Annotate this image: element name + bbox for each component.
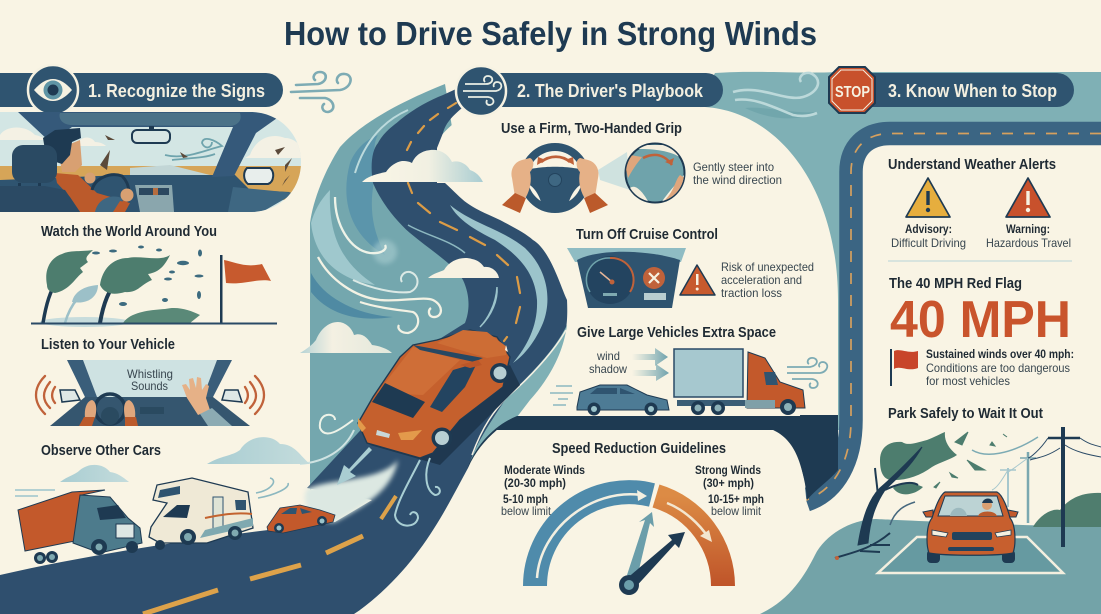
icon: stop sign: STOP [835, 84, 870, 101]
text: moderate winds: (20-30 mph) [504, 476, 566, 490]
text: moderate winds [501, 463, 585, 518]
gauge: speed reduction [535, 490, 723, 595]
title: How to Drive Safely in Strong Winds [284, 15, 817, 52]
left clouds [60, 437, 310, 482]
illustration: semi truck [674, 349, 827, 415]
wind swoosh band behind road [310, 84, 480, 490]
text: warning: Hazardous Travel [986, 236, 1071, 250]
icon: stop sign [829, 67, 875, 113]
illustration: driver in cockpit [0, 112, 301, 212]
icon: red flag [890, 349, 918, 386]
text: sustained winds [926, 347, 1074, 388]
illustration: parked car in wind [760, 427, 1101, 614]
panel: speed reduction background [360, 430, 820, 610]
text: strong winds: Strong Winds [695, 463, 761, 477]
text: sustained winds: Sustained winds over 40 mph: [926, 347, 1074, 361]
illustration: truck [15, 490, 142, 564]
text: wind shadow: wind [596, 349, 620, 363]
panel: know when to stop header [829, 67, 1074, 113]
text: cruise risk: traction loss [721, 286, 782, 300]
parking lines [878, 537, 1063, 573]
panel: recognize the signs header [0, 65, 283, 115]
text: cruise risk: acceleration and [721, 273, 802, 287]
heading: 2. The Driver's Playbook [517, 81, 704, 101]
text: advisory: Difficult Driving [891, 236, 966, 250]
text: advisory: Advisory: [905, 222, 952, 236]
navy road under panel 2 [467, 416, 838, 500]
text: strong winds: below limit [711, 504, 762, 518]
text: sustained winds: Conditions are too dangerous [926, 361, 1070, 375]
flying leaves [934, 432, 1007, 488]
mist behind car [305, 460, 398, 522]
windblown tree [880, 432, 957, 480]
darker band under wind wisps [745, 108, 815, 118]
utility poles [992, 427, 1101, 547]
heading: speed guidelines: Speed Reduction Guidelines [552, 440, 726, 457]
bush [1033, 493, 1101, 527]
text: moderate winds: Moderate Winds [504, 463, 585, 477]
heading: listen to vehicle: Listen to Your Vehicle [41, 336, 175, 353]
heading: park safely: Park Safely to Wait It Out [888, 405, 1043, 422]
heading: cruise control: Turn Off Cruise Control [576, 226, 718, 243]
illustration: camper van [149, 478, 253, 550]
icon: warning triangle [1006, 178, 1050, 217]
text: steer into wind: Gently steer into [693, 160, 774, 174]
heading: firm grip: Use a Firm, Two-Handed Grip [501, 120, 682, 137]
text: steer into wind: the wind direction [693, 173, 782, 187]
illustration: trees and flag [31, 246, 277, 327]
heading: observe other cars: Observe Other Cars [41, 442, 161, 459]
icon: eye [28, 65, 78, 115]
road centre dashes [407, 103, 520, 341]
icon: warning triangle [680, 265, 715, 295]
text: moderate winds: below limit [501, 504, 552, 518]
light edge stripe [450, 205, 547, 363]
heading: large vehicles: Give Large Vehicles Extra Space [577, 324, 776, 341]
main winding road [0, 78, 567, 614]
text: wind shadow [589, 349, 627, 376]
clouds [300, 150, 483, 353]
illustration: dashboard gauge [567, 248, 686, 308]
text: cruise risk [721, 260, 814, 300]
wind curls behind car [300, 415, 440, 526]
text: warning [986, 222, 1071, 250]
text: cruise risk: Risk of unexpected [721, 260, 814, 274]
illustration: steering wheel and zoom [502, 144, 782, 213]
text: wind shadow: shadow [589, 362, 627, 376]
icon: wind [456, 66, 506, 116]
text: strong winds: 10-15+ mph [708, 492, 764, 506]
wind wisps in band [733, 73, 818, 116]
icon: wind gust [291, 72, 351, 112]
illustration: small red car [256, 478, 335, 533]
big number: 40 mph: 40 MPH [890, 291, 1071, 349]
car front [923, 492, 1018, 563]
illustration: blue car [550, 385, 669, 416]
text: advisory [891, 222, 966, 250]
cloud over road [428, 258, 499, 278]
text: warning: Warning: [1006, 222, 1050, 236]
label: whistling sounds: Whistling [127, 367, 173, 381]
heading: watch the world: Watch the World Around You [41, 223, 217, 240]
teal shoulder [470, 325, 567, 462]
illustration: whistling windshield [36, 360, 264, 426]
label: whistling sounds: Sounds [131, 379, 168, 393]
teal sky band top right [700, 72, 1101, 430]
heading: weather alerts: Understand Weather Alerts [888, 156, 1056, 173]
skid arrow [337, 447, 372, 485]
text: sustained winds: for most vehicles [926, 374, 1010, 388]
road 3 with dashes [800, 134, 1101, 500]
panel: driver's playbook background [425, 107, 838, 417]
text: strong winds [695, 463, 764, 518]
heading: 3. Know When to Stop [888, 81, 1057, 101]
main car sliding [358, 330, 520, 465]
text: moderate winds: 5-10 mph [503, 492, 548, 506]
heading: 1. Recognize the Signs [88, 81, 265, 101]
panel: driver's playbook header [456, 66, 723, 116]
arrows: wind shadow [632, 348, 669, 381]
text: steer into wind [693, 160, 782, 187]
label: whistling sounds [127, 367, 173, 393]
text: strong winds: (30+ mph) [703, 476, 754, 490]
ground [760, 519, 1101, 614]
heading: red flag: The 40 MPH Red Flag [889, 275, 1022, 292]
icon: advisory triangle [906, 178, 950, 217]
